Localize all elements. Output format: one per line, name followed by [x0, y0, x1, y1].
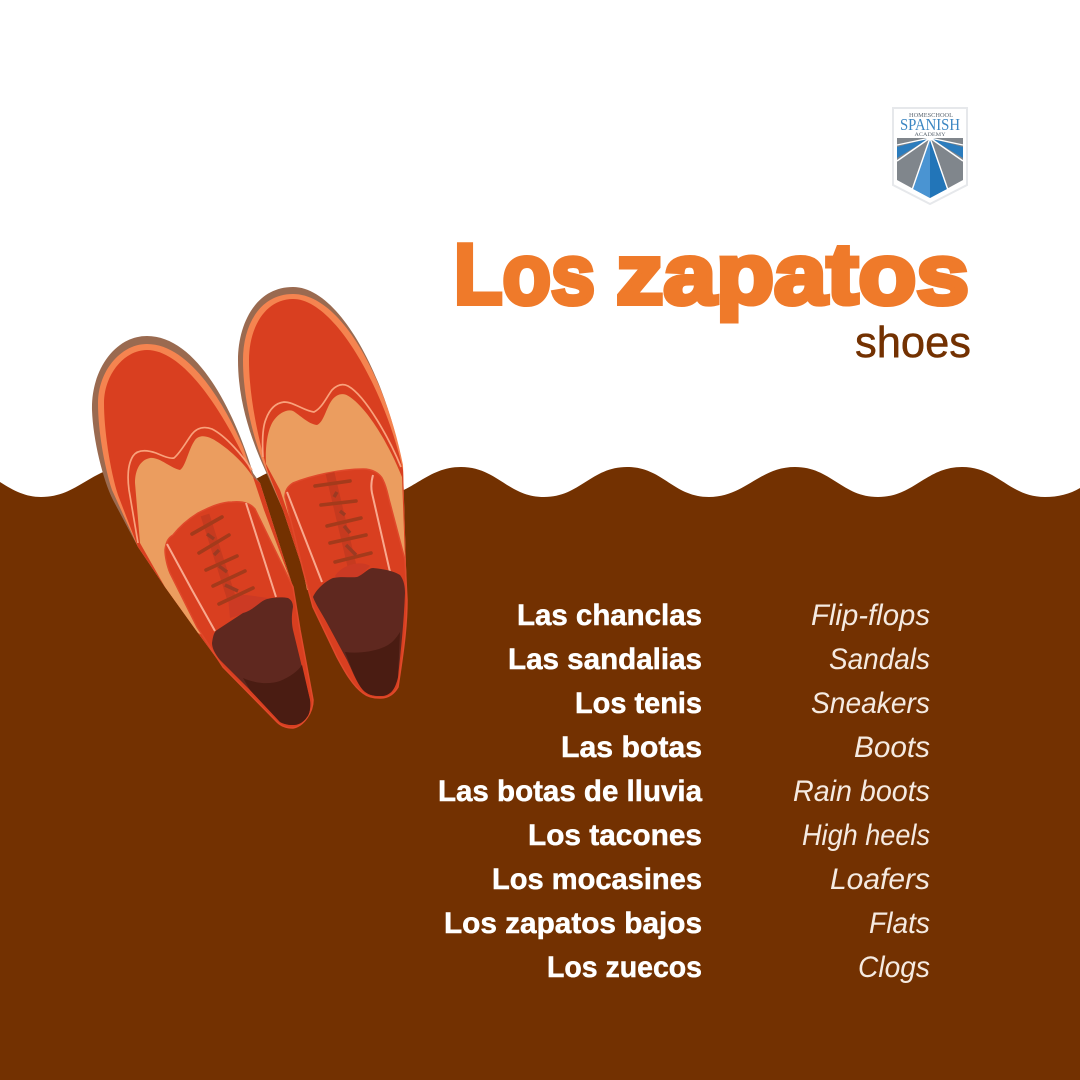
translation: Flats: Flats [869, 907, 930, 940]
left shoe [92, 336, 313, 728]
translation: Loafers: Loafers [830, 863, 930, 896]
word: Los zuecos: Los zuecos [547, 951, 702, 984]
logo: Homeschool Spanish Academy shield [893, 108, 967, 204]
word: Los tacones: Los tacones [528, 819, 702, 852]
illustration: pair of shoes [92, 287, 407, 728]
word: Las chanclas: Las chanclas [517, 599, 702, 632]
left shoe vamp [165, 502, 313, 728]
right shoe [238, 287, 407, 698]
translation: Boots: Boots [854, 731, 930, 764]
title: Los [454, 228, 595, 322]
logo: Homeschool Spanish Academy shield: SPANISH [900, 115, 960, 134]
left shoe stitches [167, 503, 276, 631]
word: Las sandalias: Las sandalias [508, 643, 702, 676]
right shoe wing stitching [263, 385, 401, 467]
word: Las botas de lluvia: Las botas de lluvia [438, 775, 702, 808]
word: Las botas: Las botas [561, 731, 702, 764]
word: Los mocasines: Los mocasines [492, 863, 702, 896]
logo: Homeschool Spanish Academy shield: HOMESCHOOL [909, 112, 953, 119]
right shoe tan upper [266, 394, 405, 590]
subtitle: shoes [855, 318, 971, 367]
title [454, 228, 969, 322]
left shoe heel shadow [243, 665, 310, 725]
translation: Flip-flops: Flip-flops [811, 599, 930, 632]
title: zapatos [616, 228, 969, 322]
left shoe wing stitching [128, 428, 252, 543]
left shoe heel [212, 597, 310, 725]
right shoe heel shadow [345, 632, 400, 696]
word: Los tenis: Los tenis [575, 687, 702, 720]
vocabulary: Spanish words [438, 599, 702, 984]
right shoe heel [313, 568, 405, 696]
right shoe laces [315, 473, 371, 582]
logo: Homeschool Spanish Academy shield: ACADEMY [914, 132, 946, 138]
right shoe vamp [285, 469, 407, 698]
translation: Sneakers: Sneakers [811, 687, 930, 720]
left shoe laces [192, 515, 268, 618]
translation: Sandals: Sandals [829, 643, 930, 676]
translation: Clogs: Clogs [858, 951, 930, 984]
left shoe tan upper [135, 436, 293, 640]
vocabulary: English translations [793, 599, 930, 984]
word: Los zapatos bajos: Los zapatos bajos [444, 907, 702, 940]
translation: High heels: High heels [802, 819, 930, 852]
wavy brown panel [0, 467, 1080, 1080]
translation: Rain boots: Rain boots [793, 775, 930, 808]
right shoe stitches [287, 475, 390, 582]
